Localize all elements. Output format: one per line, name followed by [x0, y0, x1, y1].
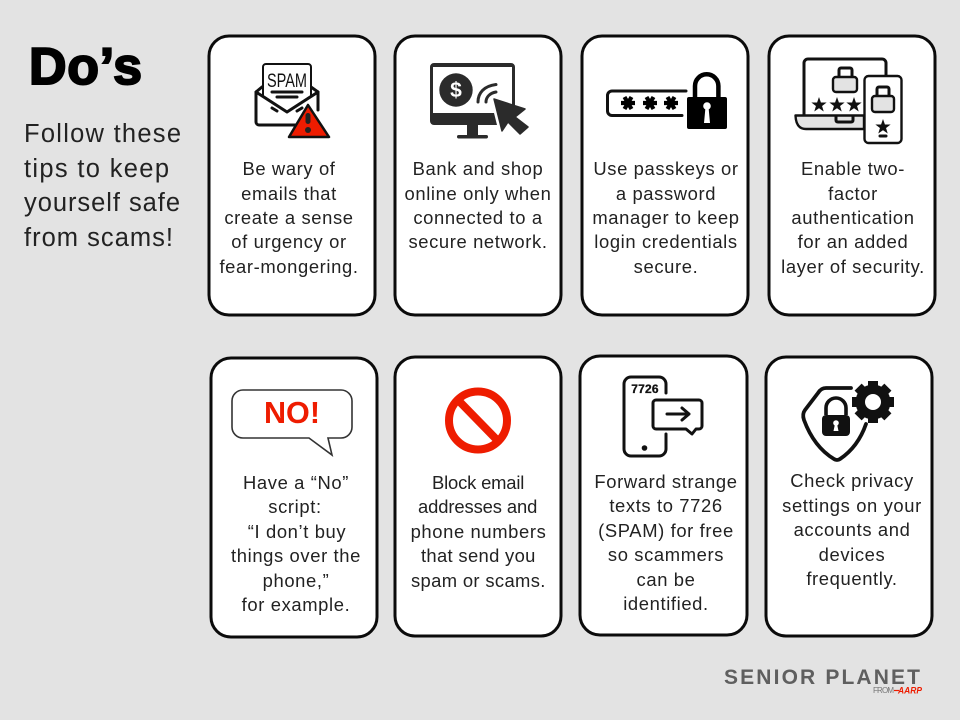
- text: passkeys: [592, 158, 740, 277]
- text: block: phone numbers: [411, 521, 546, 542]
- text: passkeys: a password: [616, 183, 716, 204]
- text: forward: Forward strange: [594, 471, 738, 492]
- text: be wary: [219, 158, 359, 277]
- text: passkeys: manager to keep: [592, 207, 740, 228]
- text: bank and shop: online only when: [405, 183, 551, 204]
- text: be wary: emails that: [241, 183, 337, 204]
- text: privacy: accounts and: [794, 519, 910, 540]
- text: two-factor: [781, 158, 925, 277]
- icon: monitor with cursor: $: [450, 79, 462, 102]
- text: block: that send you: [421, 545, 536, 566]
- text: privacy: frequently.: [806, 568, 898, 589]
- text: be wary: Be wary of: [242, 158, 336, 179]
- text: privacy: devices: [819, 544, 885, 565]
- text: bank and shop: [405, 158, 551, 252]
- panel: forward texts: [580, 356, 747, 635]
- logo: Senior Planet from AARP: FROM: [873, 686, 894, 695]
- text: privacy: Check privacy: [790, 470, 914, 491]
- icon: phone with forward message: [624, 377, 702, 456]
- text: forward: so scammers: [608, 544, 724, 565]
- text: be wary: fear-mongering.: [219, 256, 359, 277]
- text: no script: script:: [268, 496, 322, 517]
- intro text: tips to keep: [24, 155, 169, 183]
- panel: block: [395, 357, 561, 636]
- text: forward: [594, 471, 738, 614]
- text: bank and shop: connected to a: [413, 207, 543, 228]
- text: no script: things over the: [231, 545, 361, 566]
- intro text: yourself safe: [24, 189, 180, 217]
- text: forward: (SPAM) for free: [598, 520, 734, 541]
- panel: passkeys: [582, 36, 748, 315]
- text: two-factor: for an added: [798, 231, 908, 252]
- text: no script: phone,”: [263, 570, 329, 591]
- icon: phone with forward message: 7726: [631, 382, 659, 396]
- text: privacy: [782, 470, 922, 589]
- icon: monitor with cursor: [430, 63, 528, 138]
- text: two-factor: Enable two-: [801, 158, 905, 179]
- panel: no script: [211, 358, 377, 637]
- text: block: Block email: [432, 472, 525, 493]
- text: block: [411, 472, 546, 591]
- logo: Senior Planet from AARP: SENIOR PLANET: [724, 666, 920, 689]
- text: two-factor: layer of security.: [781, 256, 925, 277]
- text: bank and shop: Bank and shop: [413, 158, 543, 179]
- text: no script: [231, 472, 361, 615]
- text: block: addresses and: [418, 496, 538, 517]
- text: privacy: settings on your: [782, 495, 922, 516]
- panel: privacy settings: [766, 357, 932, 636]
- text: bank and shop: secure network.: [408, 231, 548, 252]
- text: forward: texts to 7726: [609, 495, 723, 516]
- text: no script: for example.: [242, 594, 350, 615]
- icon: NO speech bubble: NO!: [264, 395, 320, 430]
- intro text: from scams!: [24, 224, 173, 252]
- text: be wary: of urgency or: [231, 231, 347, 252]
- text: block: spam or scams.: [411, 570, 546, 591]
- text: passkeys: login credentials: [594, 231, 738, 252]
- text: two-factor: factor: [828, 183, 878, 204]
- text: passkeys: secure.: [634, 256, 698, 277]
- icon: laptop and phone with locks: [796, 59, 902, 143]
- intro text: Follow these: [24, 120, 181, 148]
- panel: two-factor: [769, 36, 935, 315]
- logo: Senior Planet from AARP: AARP: [897, 686, 923, 696]
- text: no script: Have a “No”: [243, 472, 349, 493]
- icon: prohibition sign: [449, 392, 507, 450]
- panel: secure network: [395, 36, 561, 315]
- text: be wary: create a sense: [224, 207, 354, 228]
- icon: NO speech bubble: [232, 390, 352, 455]
- icon: spam envelope warning: SPAM: [267, 71, 307, 92]
- text: two-factor: authentication: [791, 207, 915, 228]
- text: no script: “I don’t buy: [248, 521, 346, 542]
- icon: spam envelope warning: [256, 64, 329, 137]
- icon: password field and padlock: [608, 74, 727, 129]
- text: forward: can be: [637, 569, 695, 590]
- panel: spam emails: [209, 36, 375, 315]
- text: passkeys: Use passkeys or: [593, 158, 739, 179]
- icon: shield lock gear: [803, 381, 894, 460]
- text: forward: identified.: [623, 593, 709, 614]
- title: Do’s: [29, 38, 142, 96]
- intro text: [24, 120, 181, 252]
